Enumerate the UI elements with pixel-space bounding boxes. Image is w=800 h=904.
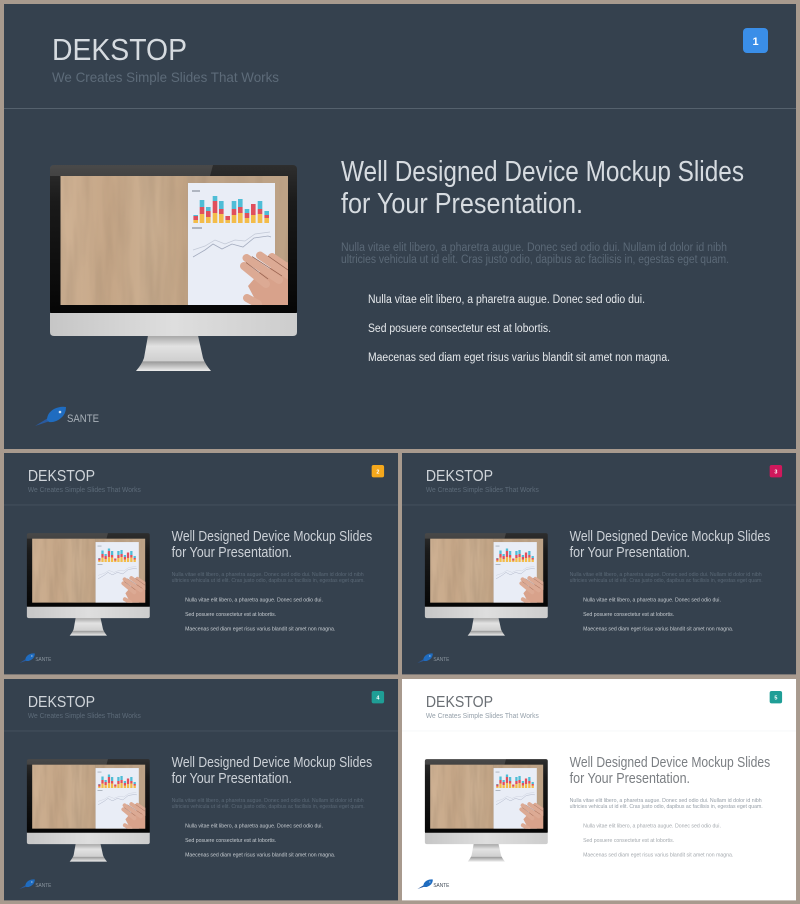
bullet list: Sed posuere consectetur est at lobortis. [583,838,674,844]
body paragraph [172,572,365,584]
subtitle: We Creates Simple Slides That Works [426,487,539,494]
badge: number 2 [372,465,384,477]
logo: Sante [417,879,450,889]
heading: for Your Presentation. [172,545,292,561]
body paragraph: ultricies vehicula ut id elit. Cras justo odio, dapibus ac facilisis in, egestas eget quam. [570,578,763,584]
icon: desktop monitor mockup [27,759,150,862]
badge: number 5 [770,691,782,703]
logo: Sante [35,407,99,426]
panel: slide 3 [402,453,796,674]
panel: slide 2 [4,453,398,674]
body paragraph [570,798,763,810]
title: DEKSTOP [426,694,493,711]
badge: number 3 [770,465,782,477]
icon: desktop monitor mockup [27,533,150,636]
subtitle: We Creates Simple Slides That Works [28,713,141,720]
heading: Well Designed Device Mockup Slides [172,529,372,545]
badge: number 1 [743,28,768,53]
logo: Sante: SANTE [35,883,52,889]
panel: slide 5 (light) [402,679,796,900]
logo: Sante: SANTE [35,657,52,663]
badge: number 2: 2 [376,469,379,475]
bullet list: Nulla vitae elit libero, a pharetra augue. Donec sed odio dui. [185,598,323,604]
subtitle: We Creates Simple Slides That Works [426,713,539,720]
bullet list: Sed posuere consectetur est at lobortis. [368,323,551,335]
bullet list: Sed posuere consectetur est at lobortis. [583,612,674,618]
heading: for Your Presentation. [341,188,583,220]
body paragraph: Nulla vitae elit libero, a pharetra augue. Donec sed odio dui. Nullam id dolor id nibh [172,798,364,804]
bullet list: Nulla vitae elit libero, a pharetra augue. Donec sed odio dui. [368,294,645,306]
bullet list: Maecenas sed diam eget risus varius blandit sit amet non magna. [368,352,670,364]
heading [570,755,770,787]
heading [570,529,770,561]
bullet list: Maecenas sed diam eget risus varius blandit sit amet non magna. [583,627,734,633]
badge: number 4: 4 [376,695,380,701]
logo: Sante [19,653,52,663]
body paragraph: ultricies vehicula ut id elit. Cras justo odio, dapibus ac facilisis in, egestas eget quam. [172,578,365,584]
logo: Sante: SANTE [433,657,450,663]
bullet list: Nulla vitae elit libero, a pharetra augue. Donec sed odio dui. [185,824,323,830]
subtitle: We Creates Simple Slides That Works [28,487,141,494]
title: DEKSTOP [28,694,95,711]
body paragraph: Nulla vitae elit libero, a pharetra augue. Donec sed odio dui. Nullam id dolor id nibh [570,798,762,804]
body paragraph [172,798,365,810]
bullet list [185,598,336,633]
heading: for Your Presentation. [570,545,690,561]
logo: Sante [19,879,52,889]
bullet list [583,598,734,633]
heading: for Your Presentation. [172,771,292,787]
icon: desktop monitor mockup [50,165,297,371]
bullet list [368,294,670,364]
heading: Well Designed Device Mockup Slides [172,755,372,771]
bullet list: Maecenas sed diam eget risus varius blandit sit amet non magna. [185,853,336,859]
title: DEKSTOP [52,32,187,67]
bullet list [583,824,734,859]
heading [172,529,372,561]
heading: for Your Presentation. [570,771,690,787]
icon: desktop monitor mockup [425,759,548,862]
heading [172,755,372,787]
body paragraph: ultricies vehicula ut id elit. Cras justo odio, dapibus ac facilisis in, egestas eget quam. [172,804,365,810]
logo: Sante: SANTE [67,413,99,425]
logo: Sante [417,653,450,663]
panel: slide 4 [4,679,398,900]
panel: main slide [4,4,796,449]
badge: number 5: 5 [774,695,777,701]
icon: desktop monitor mockup [425,533,548,636]
body paragraph [341,242,729,266]
bullet list: Sed posuere consectetur est at lobortis. [185,612,276,618]
title: DEKSTOP [426,468,493,485]
body paragraph: Nulla vitae elit libero, a pharetra augue. Donec sed odio dui. Nullam id dolor id nibh [172,572,364,578]
badge: number 4 [372,691,384,703]
bullet list: Nulla vitae elit libero, a pharetra augue. Donec sed odio dui. [583,598,721,604]
logo: Sante: SANTE [433,883,450,889]
body paragraph: ultricies vehicula ut id elit. Cras justo odio, dapibus ac facilisis in, egestas eget quam. [570,804,763,810]
bullet list [185,824,336,859]
bullet list: Sed posuere consectetur est at lobortis. [185,838,276,844]
heading [341,156,744,220]
subtitle: We Creates Simple Slides That Works [52,69,279,85]
body paragraph [570,572,763,584]
bullet list: Maecenas sed diam eget risus varius blandit sit amet non magna. [185,627,336,633]
bullet list: Maecenas sed diam eget risus varius blandit sit amet non magna. [583,853,734,859]
badge: number 3: 3 [774,469,777,475]
bullet list: Nulla vitae elit libero, a pharetra augue. Donec sed odio dui. [583,824,721,830]
title: DEKSTOP [28,468,95,485]
body paragraph: Nulla vitae elit libero, a pharetra augue. Donec sed odio dui. Nullam id dolor id nibh [570,572,762,578]
body paragraph: Nulla vitae elit libero, a pharetra augue. Donec sed odio dui. Nullam id dolor id nibh [341,242,727,254]
body paragraph: ultricies vehicula ut id elit. Cras justo odio, dapibus ac facilisis in, egestas eget quam. [341,254,729,266]
badge: number 1: 1 [752,36,759,48]
